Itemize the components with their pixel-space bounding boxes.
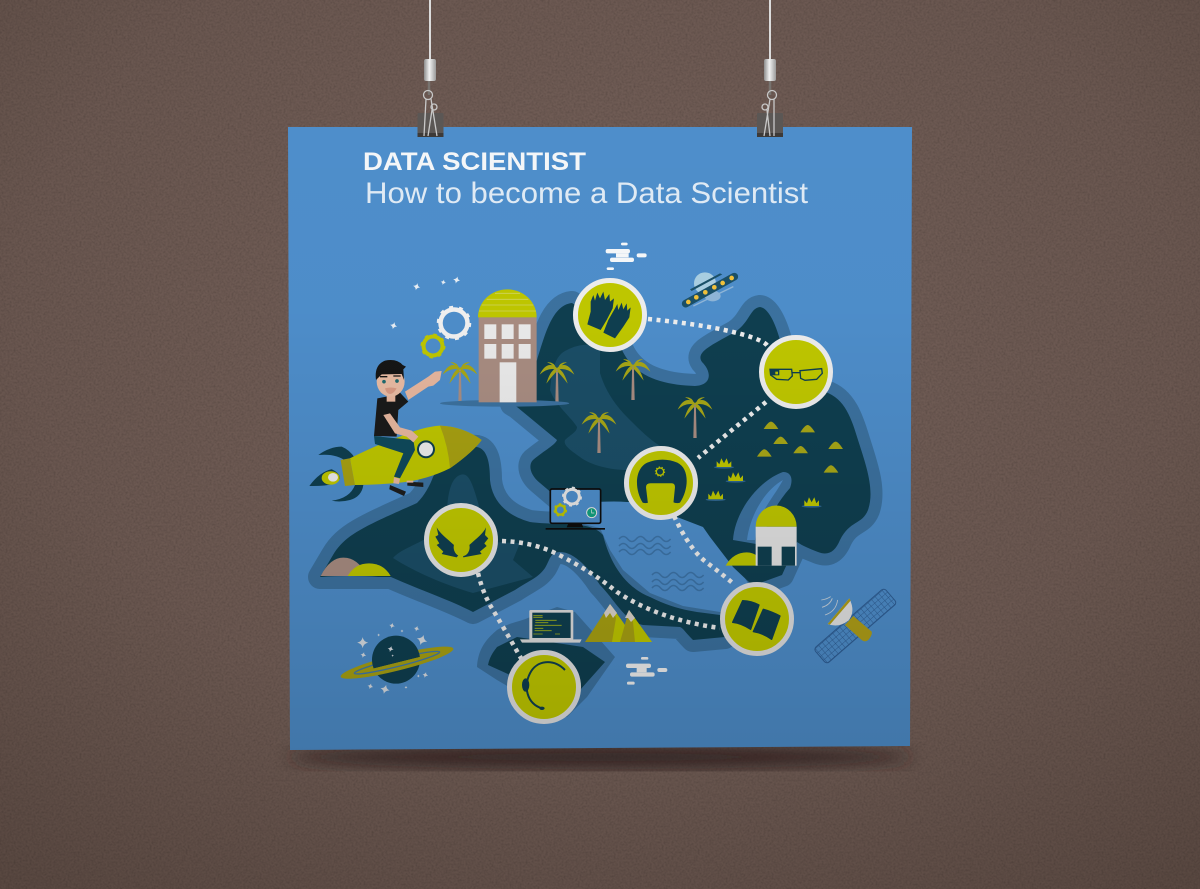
left hanging clip xyxy=(418,0,444,137)
subtitle: How to become a Data Scientist xyxy=(365,177,809,210)
island: north land shelf xyxy=(512,303,871,583)
lagoon xyxy=(733,472,792,545)
dotted route xyxy=(478,319,768,660)
step 1: gloves xyxy=(576,280,644,350)
rocket xyxy=(309,426,482,501)
small hills and shrubs xyxy=(706,422,843,508)
satellite xyxy=(814,588,897,664)
west hills xyxy=(320,558,391,577)
sparkle stars xyxy=(389,276,461,330)
step 4: wings xyxy=(426,506,496,574)
step 3: helmet xyxy=(626,448,696,518)
title: DATA SCIENTIST xyxy=(363,148,586,176)
south land lighter patches xyxy=(393,474,533,593)
monitor icon xyxy=(546,488,605,530)
mountains xyxy=(585,604,652,642)
building xyxy=(440,289,569,407)
cloud top xyxy=(606,243,647,270)
south small island xyxy=(477,607,615,717)
laptop icon xyxy=(520,610,582,643)
open water of the bay xyxy=(584,502,748,612)
palm trees xyxy=(443,359,712,453)
north land fill xyxy=(512,303,871,583)
cloud bottom xyxy=(626,657,667,685)
right hanging clip xyxy=(757,0,783,137)
gears xyxy=(422,307,470,358)
island: south land shelf xyxy=(320,447,725,640)
lighting overlay xyxy=(289,384,911,750)
step 2: smart glasses xyxy=(762,338,830,406)
step 5: book xyxy=(722,584,792,654)
north land lighter patch xyxy=(550,345,662,472)
poster xyxy=(280,120,920,760)
ufo xyxy=(686,272,734,306)
poster shadow xyxy=(288,745,912,769)
south land fill xyxy=(320,447,725,640)
character riding the rocket xyxy=(374,360,442,496)
dome hut xyxy=(726,506,797,566)
planet xyxy=(339,622,455,695)
waves xyxy=(619,536,704,590)
step 6: headset xyxy=(510,652,578,722)
